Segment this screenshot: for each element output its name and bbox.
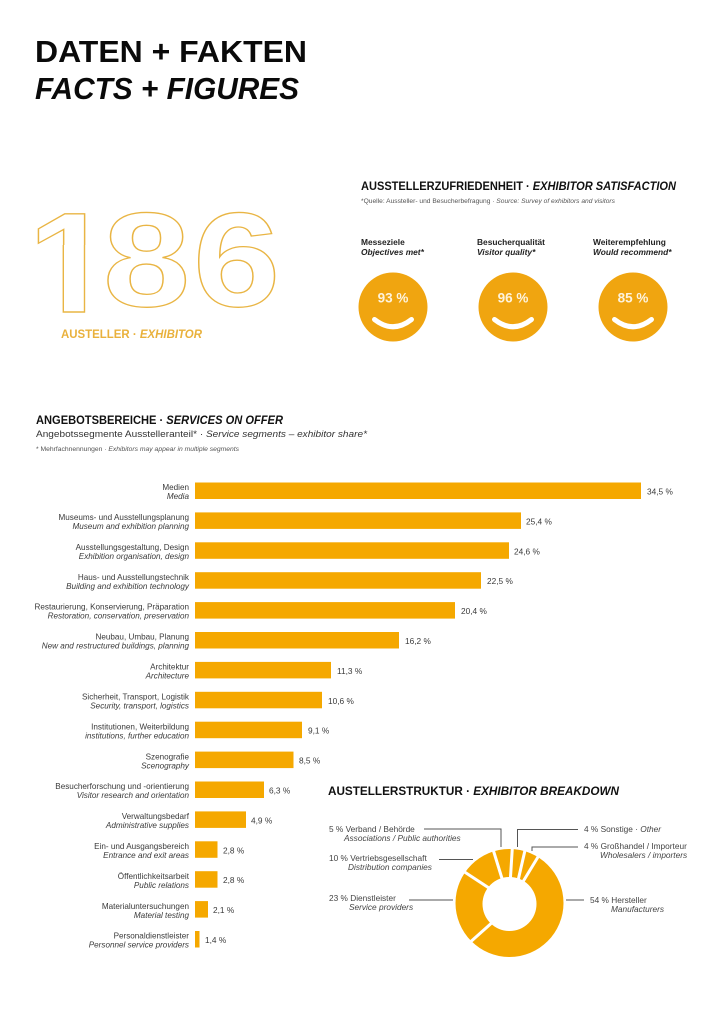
- bar: Sicherheit: 10,6 %: [328, 696, 354, 706]
- bar: Architektur: [145, 662, 363, 680]
- bar: Medien: [162, 482, 673, 501]
- bar: Restaurierung: [35, 602, 487, 620]
- label: 23% service providers: [329, 893, 453, 912]
- breakdown heading: AUSTELLERSTRUKTUR · EXHIBITOR BREAKDOWN: [328, 784, 619, 798]
- bar: Neubau: New and restructured buildings, planning: [42, 642, 189, 650]
- smiley: would recommend: Weiterempfehlung: [593, 237, 666, 247]
- bar: Institutionen: [85, 722, 330, 740]
- bar: Medien: Medien: [162, 483, 189, 492]
- bar: Restaurierung: Restoration, conservation, preservation: [48, 612, 189, 620]
- bar: Medien: Media: [167, 492, 189, 501]
- label: 54% manufacturers: 54 % Hersteller: [590, 895, 647, 905]
- bar: Personaldienstleister: 1,4 %: [205, 935, 227, 945]
- bar: Szenografie: [141, 752, 321, 770]
- smiley: visitor quality: Visitor quality*: [477, 247, 536, 257]
- bar: Museums- und Ausstellungsplanung: Museums- und Ausstellungsplanung: [58, 513, 189, 522]
- bar: Öffentlichkeitsarbeit: 2,8 %: [223, 875, 245, 885]
- label: 10% distribution: Distribution companies: [348, 862, 432, 872]
- heading: services on offer: ANGEBOTSBEREICHE · SERVICES ON OFFER: [36, 413, 283, 427]
- heading: services on offer: Angebotssegmente Ausstelleranteil* · Service segments – exhibitor share*: [36, 429, 367, 440]
- bar: Verwaltungsbedarf: [105, 811, 273, 830]
- bar: Materialuntersuchungen: Material testing: [134, 911, 189, 920]
- big number: 186 exhibitors: [24, 185, 280, 341]
- bar: Ausstellungsgestaltung: [76, 542, 540, 561]
- smiley: would recommend: 85 %: [618, 290, 648, 306]
- bar: Architektur: 11,3 %: [337, 666, 363, 676]
- smiley: would recommend: [593, 237, 672, 342]
- bar: Neubau: [42, 632, 431, 650]
- label: 4% wholesalers: [532, 841, 687, 860]
- bar: Öffentlichkeitsarbeit: Öffentlichkeitsarbeit: [118, 871, 190, 881]
- smiley: visitor quality: [477, 237, 548, 342]
- bar: Ein- und Ausgangsbereich: 2,8 %: [223, 845, 245, 855]
- bar: Restaurierung: Restaurierung, Konservierung, Präparation: [35, 602, 189, 612]
- title: [35, 34, 307, 106]
- bar: Museums- und Ausstellungsplanung: Museum and exhibition planning: [72, 522, 189, 531]
- bar: Personaldienstleister: Personaldienstleister: [114, 932, 189, 940]
- bar: Ein- und Ausgangsbereich: Ein- und Ausgangsbereich: [94, 842, 189, 851]
- smiley: objectives met: [358, 237, 428, 342]
- bar chart: services on offer: [35, 482, 673, 950]
- bar: Ein- und Ausgangsbereich: Entrance and exit areas: [103, 851, 189, 860]
- bar: Haus- und Ausstellungstechnik: Building and exhibition technology: [66, 582, 190, 591]
- satisfaction heading: AUSSTELLERZUFRIEDENHEIT · EXHIBITOR SATISFACTION: [361, 179, 676, 193]
- bar: Szenografie: Szenografie: [146, 752, 189, 762]
- label: 4% wholesalers: Wholesalers / importers: [600, 850, 687, 860]
- bar: Ausstellungsgestaltung: 24,6 %: [514, 546, 540, 556]
- big number: 186 exhibitors: 1: [28, 186, 113, 335]
- bar: Haus- und Ausstellungstechnik: Haus- und Ausstellungstechnik: [78, 573, 190, 582]
- bar: Materialuntersuchungen: Materialuntersuchungen: [102, 902, 189, 911]
- bar: Besucherforschung: [55, 782, 291, 800]
- smiley: visitor quality: Besucherqualität: [477, 237, 545, 247]
- bar: Medien: 34,5 %: [647, 486, 673, 496]
- panel: exhibitor satisfaction: [358, 179, 676, 342]
- bar: Szenografie: Scenography: [141, 762, 190, 770]
- smiley: objectives met: Objectives met*: [361, 247, 425, 257]
- label: 54% manufacturers: Manufacturers: [611, 904, 664, 914]
- bar: Restaurierung: 20,4 %: [461, 606, 487, 616]
- bar: Verwaltungsbedarf: Verwaltungsbedarf: [122, 812, 190, 821]
- bar: Museums- und Ausstellungsplanung: 25,4 %: [526, 516, 552, 526]
- smiley: visitor quality: 96 %: [498, 290, 528, 306]
- bar: Öffentlichkeitsarbeit: [118, 871, 245, 890]
- bar: Materialuntersuchungen: [102, 901, 235, 920]
- bar: Verwaltungsbedarf: Administrative supplies: [105, 821, 189, 830]
- heading: services on offer: * Mehrfachnennungen · Exhibitors may appear in multiple segments: [36, 446, 239, 453]
- bar: Neubau: 16,2 %: [405, 636, 431, 646]
- bar: Ein- und Ausgangsbereich: [94, 841, 245, 860]
- bar: Personaldienstleister: Personnel service providers: [89, 940, 189, 950]
- bar: Besucherforschung: Visitor research and orientation: [77, 791, 189, 800]
- panel: exhibitor breakdown: [328, 784, 687, 957]
- bar: Personaldienstleister: [89, 931, 227, 950]
- bar: Sicherheit: [82, 692, 354, 710]
- bar: Besucherforschung: 6,3 %: [269, 786, 291, 796]
- donut chart: [456, 845, 564, 957]
- label: 10% distribution: 10 % Vertriebsgesellschaft: [329, 853, 427, 863]
- bar: Haus- und Ausstellungstechnik: [66, 572, 513, 591]
- label: 10% distribution: [329, 853, 473, 872]
- bar: Architektur: Architektur: [150, 662, 189, 672]
- bar: Architektur: Architecture: [145, 672, 189, 680]
- bar: Materialuntersuchungen: 2,1 %: [213, 905, 235, 915]
- label: 4% wholesalers: 4 % Großhandel / Importeur: [584, 841, 687, 851]
- bar: Museums- und Ausstellungsplanung: [58, 512, 552, 531]
- bar: Institutionen: institutions, further education: [85, 732, 189, 740]
- heading: services on offer: [36, 413, 367, 453]
- bar: Szenografie: 8,5 %: [299, 756, 321, 766]
- title: FACTS + FIGURES: [35, 71, 299, 106]
- big number: 186 exhibitors: 6: [193, 185, 280, 334]
- bar: Öffentlichkeitsarbeit: Public relations: [134, 881, 189, 890]
- satisfaction source note: *Quelle: Aussteller- und Besucherbefragung · Source: Survey of exhibitors and visitors: [361, 198, 615, 205]
- label: 54% manufacturers: [566, 895, 664, 914]
- bar: Verwaltungsbedarf: 4,9 %: [251, 815, 273, 825]
- label: 4% other: [518, 824, 662, 847]
- bar: Ausstellungsgestaltung: Exhibition organisation, design: [79, 552, 189, 561]
- label: 5% associations: [329, 824, 501, 847]
- big number: 186 exhibitors: AUSTELLER · EXHIBITOR: [61, 329, 203, 341]
- label: 23% service providers: 23 % Dienstleister: [329, 893, 396, 903]
- bar: Sicherheit: Security, transport, logistics: [90, 702, 189, 710]
- bar: Ausstellungsgestaltung: Ausstellungsgestaltung, Design: [76, 543, 189, 552]
- bar: Neubau: Neubau, Umbau, Planung: [95, 632, 189, 642]
- bar: Haus- und Ausstellungstechnik: 22,5 %: [487, 576, 513, 586]
- bar: Institutionen: Institutionen, Weiterbildung: [91, 722, 189, 732]
- smiley: objectives met: Messeziele: [361, 237, 405, 247]
- title: DATEN + FAKTEN: [35, 34, 307, 69]
- label: 5% associations: 5 % Verband / Behörde: [329, 824, 415, 834]
- smiley: would recommend: Would recommend*: [593, 247, 672, 257]
- label: 4% other: 4 % Sonstige · Other: [584, 824, 662, 834]
- bar: Institutionen: 9,1 %: [308, 726, 330, 736]
- bar: Sicherheit: Sicherheit, Transport, Logistik: [82, 692, 190, 702]
- big number: 186 exhibitors: 8: [103, 185, 190, 334]
- label: 5% associations: Associations / Public authorities: [343, 833, 461, 843]
- smiley: objectives met: 93 %: [378, 290, 408, 306]
- bar: Besucherforschung: Besucherforschung und -orientierung: [55, 782, 189, 791]
- label: 23% service providers: Service providers: [349, 902, 413, 912]
